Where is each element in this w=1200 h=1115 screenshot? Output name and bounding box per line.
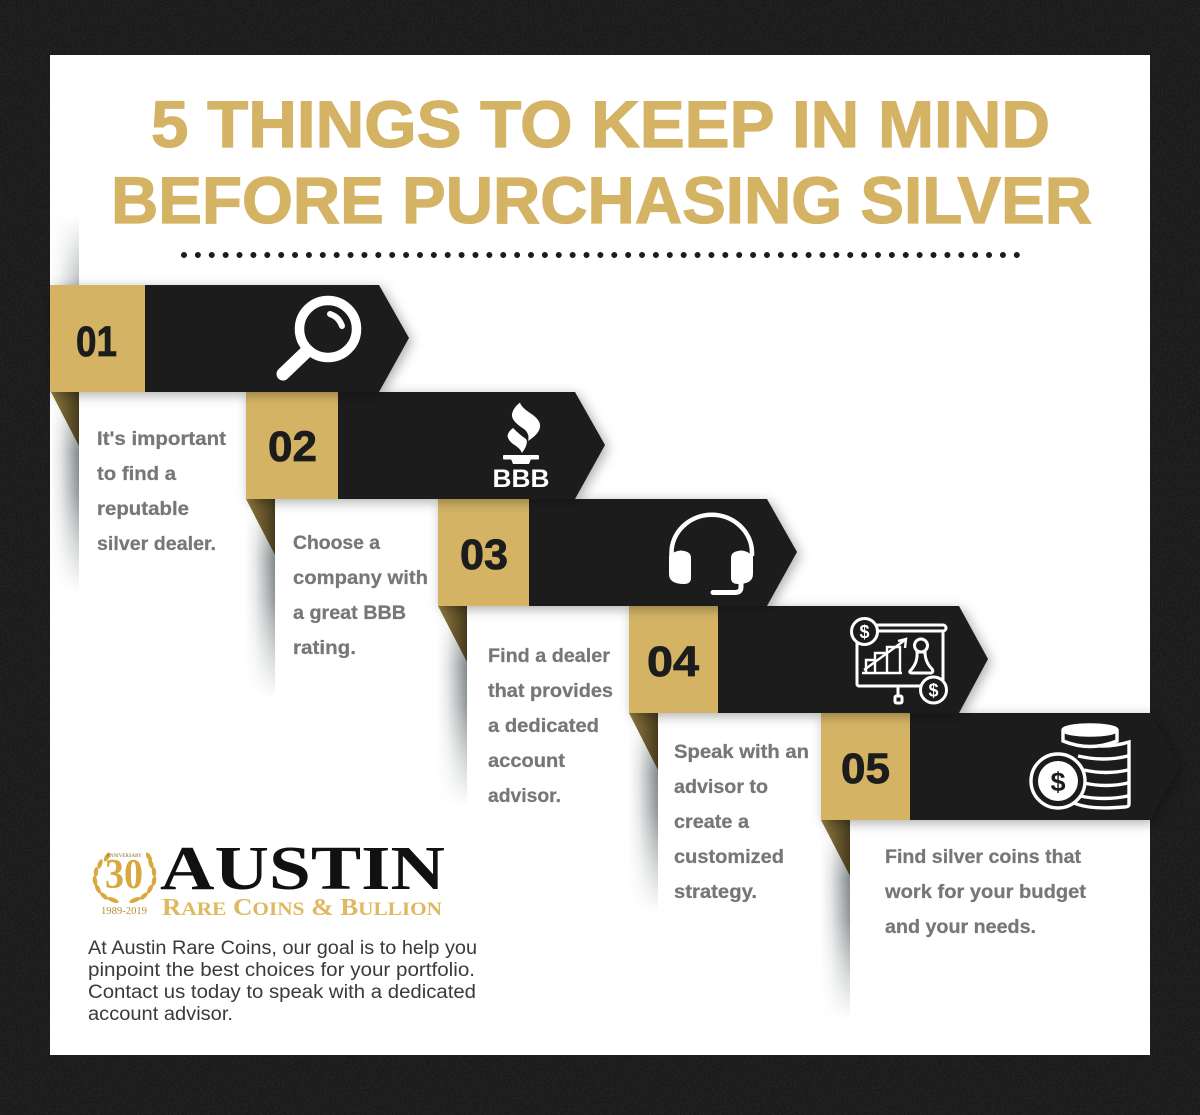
title: [111, 87, 1092, 237]
icon: coin stack: $: [1050, 767, 1066, 797]
text block: step 3: that provides: [488, 680, 613, 702]
text block: step 2: company with: [293, 567, 428, 589]
text block: step 1: It's important: [97, 428, 227, 450]
text block: step 1: silver dealer.: [97, 533, 216, 555]
text block: step 3: account: [488, 750, 566, 772]
title: 5 THINGS TO KEEP IN MIND: [151, 87, 1050, 161]
text block: step 4: [674, 741, 809, 903]
ribbon 05: [821, 713, 1180, 820]
company logo: AUSTIN: [160, 835, 445, 903]
footer text: At Austin Rare Coins, our goal is to help you: [88, 938, 477, 959]
laurel wreath with 30: 1989-2019: [101, 905, 147, 917]
text block: step 5: [884, 846, 1087, 938]
ribbon 03: 03: [460, 531, 508, 579]
text block: step 4: create a: [674, 811, 749, 833]
ribbon 05: 05: [841, 745, 890, 793]
column shadows: [50, 215, 850, 1020]
text block: step 4: strategy.: [674, 881, 757, 903]
text block: step 2: [293, 532, 428, 659]
footer text: Contact us today to speak with a dedicated: [88, 982, 476, 1003]
text block: step 2: a great BBB: [293, 602, 406, 624]
company logo: [92, 835, 445, 921]
icon: strategy presentation board: $: [928, 680, 939, 700]
icon: strategy presentation board: $: [859, 622, 870, 642]
ribbon 04: [629, 606, 988, 713]
text block: step 1: reputable: [97, 498, 189, 520]
text block: step 3: [488, 645, 613, 807]
fold triangles: [51, 392, 850, 876]
ribbon 02: 02: [268, 423, 317, 471]
icon: headset: [669, 515, 753, 592]
text block: step 3: Find a dealer: [488, 645, 610, 667]
text block: step 4: Speak with an: [674, 741, 809, 763]
ribbon 03: [438, 499, 797, 606]
footer text: [88, 938, 477, 1025]
icon: BBB torch logo: BBB: [492, 465, 550, 493]
ribbon 02: [246, 392, 605, 499]
text block: step 2: Choose a: [293, 532, 380, 554]
title: BEFORE PURCHASING SILVER: [111, 163, 1092, 237]
text block: step 1: to find a: [97, 463, 176, 485]
laurel wreath with 30: ANNIVERSARY: [106, 854, 142, 859]
text block: step 4: advisor to: [674, 776, 768, 798]
laurel wreath with 30: [92, 852, 157, 917]
text block: step 4: customized: [674, 846, 784, 868]
icon: strategy presentation board: [852, 618, 946, 703]
ribbon 01: 01: [76, 318, 117, 366]
text block: step 1: [97, 428, 227, 555]
text block: step 2: rating.: [293, 637, 356, 659]
ribbon 04: 04: [647, 638, 699, 686]
text block: step 5: work for your budget: [884, 881, 1087, 903]
icon: magnifying glass: [283, 300, 356, 374]
text block: step 5: and your needs.: [885, 916, 1036, 938]
text block: step 3: advisor.: [488, 785, 561, 807]
footer text: account advisor.: [88, 1004, 233, 1025]
text block: step 3: a dedicated: [488, 715, 599, 737]
icon: BBB torch logo: [492, 402, 550, 493]
icon: coin stack: [1031, 725, 1129, 808]
company logo: RARE COINS & B ULLION: [162, 895, 442, 921]
text block: step 5: Find silver coins that: [885, 846, 1082, 868]
ribbon 01: [50, 285, 409, 392]
laurel wreath with 30: 30: [105, 852, 143, 898]
footer text: pinpoint the best choices for your portfolio.: [88, 960, 475, 981]
